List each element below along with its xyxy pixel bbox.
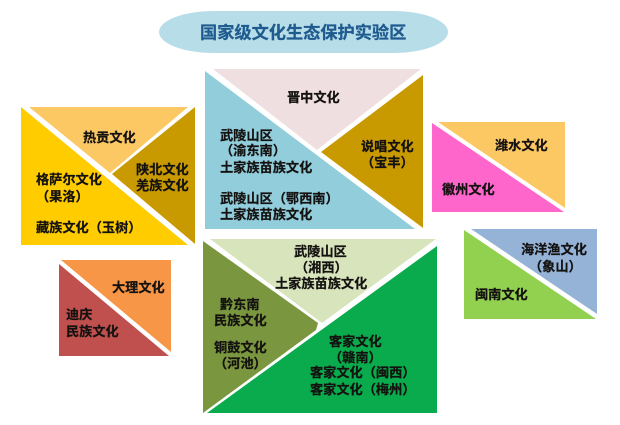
triangle: 武陵山区 湘西: 土家族苗族文化 bbox=[275, 275, 367, 291]
triangle: 黔东南 铜鼓: 民族文化 bbox=[214, 312, 267, 328]
triangle: 陕北文化 羌族文化: 陕北文化 bbox=[136, 161, 189, 177]
triangle: 客家文化: （赣南） bbox=[329, 349, 382, 365]
title: 国家级文化生态保护实验区 bbox=[200, 22, 406, 42]
triangle: 热贡文化: 热贡文化 bbox=[83, 129, 136, 145]
triangle: 晋中文化 bbox=[213, 69, 421, 150]
panel: 海洋渔 闽南 bbox=[464, 229, 597, 319]
triangle: 晋中文化: 晋中文化 bbox=[287, 89, 340, 105]
triangle: 武陵山区 渝东南 鄂西南: 土家族苗族文化 bbox=[220, 206, 312, 222]
triangle: 黔东南 铜鼓: （河池） bbox=[214, 356, 267, 371]
triangle: 迪庆民族文化: 民族文化 bbox=[66, 323, 119, 339]
title bbox=[159, 11, 448, 53]
triangle: 格萨尔文化 藏族文化 bbox=[21, 107, 188, 245]
triangle: 武陵山区 渝东南 鄂西南: （渝东南） bbox=[220, 142, 286, 158]
triangle: 迪庆民族文化: 迪庆 bbox=[66, 306, 92, 322]
triangle: 闽南文化: 闽南文化 bbox=[475, 286, 528, 302]
triangle: 徽州文化: 徽州文化 bbox=[442, 181, 495, 197]
triangle: 客家文化: 客家文化 bbox=[329, 333, 382, 349]
triangle: 格萨尔文化 藏族文化: 藏族文化（玉树） bbox=[36, 219, 142, 235]
panel: bottom centre cluster bbox=[203, 239, 437, 413]
triangle: 海洋渔文化: （象山） bbox=[529, 258, 582, 274]
triangle: 武陵山区 渝东南 鄂西南: 土家族苗族文化 bbox=[220, 159, 312, 175]
triangle: 说唱文化 宝丰: （宝丰） bbox=[361, 154, 414, 170]
triangle: 大理文化: 大理文化 bbox=[112, 279, 165, 295]
triangle: 格萨尔文化 藏族文化: 格萨尔文化 bbox=[36, 171, 102, 187]
triangle: 客家文化 bbox=[207, 246, 437, 413]
triangle: 武陵山区 湘西: 武陵山区 bbox=[294, 244, 347, 259]
triangle: 热贡文化 bbox=[29, 107, 188, 173]
triangle: 陕北文化 羌族文化 bbox=[112, 107, 195, 244]
triangle: 黔东南 铜鼓: 铜鼓文化 bbox=[214, 339, 267, 355]
triangle: 海洋渔文化: 海洋渔文化 bbox=[521, 241, 587, 257]
triangle: 客家文化: 客家文化（梅州） bbox=[310, 381, 416, 397]
panel: 大理 迪庆 bbox=[59, 260, 171, 356]
triangle: 说唱文化 宝丰: 说唱文化 bbox=[361, 138, 414, 154]
triangle: 迪庆民族文化 bbox=[59, 264, 169, 356]
panel: left cluster bbox=[21, 107, 195, 245]
triangle: 武陵山区 渝东南 鄂西南 bbox=[205, 71, 415, 229]
triangle: 武陵山区 湘西 bbox=[210, 239, 436, 323]
panel: 潍水 徽州 bbox=[432, 122, 565, 212]
triangle: 武陵山区 湘西: （湘西） bbox=[295, 259, 348, 275]
triangle: 黔东南 铜鼓 bbox=[203, 241, 318, 413]
panel: top centre cluster bbox=[205, 69, 423, 229]
triangle: 陕北文化 羌族文化: 羌族文化 bbox=[136, 177, 189, 193]
triangle: 海洋渔文化 bbox=[471, 229, 597, 314]
triangle: 武陵山区 渝东南 鄂西南: 武陵山区（鄂西南） bbox=[220, 191, 339, 206]
triangle: 客家文化: 客家文化（闽西） bbox=[310, 364, 416, 380]
triangle: 武陵山区 渝东南 鄂西南: 武陵山区 bbox=[220, 128, 273, 143]
triangle: 说唱文化 宝丰 bbox=[321, 75, 423, 228]
triangle: 格萨尔文化 藏族文化: （果洛） bbox=[36, 188, 89, 204]
triangle: 黔东南 铜鼓: 黔东南 bbox=[220, 296, 260, 312]
triangle: 潍水文化: 潍水文化 bbox=[495, 137, 548, 153]
